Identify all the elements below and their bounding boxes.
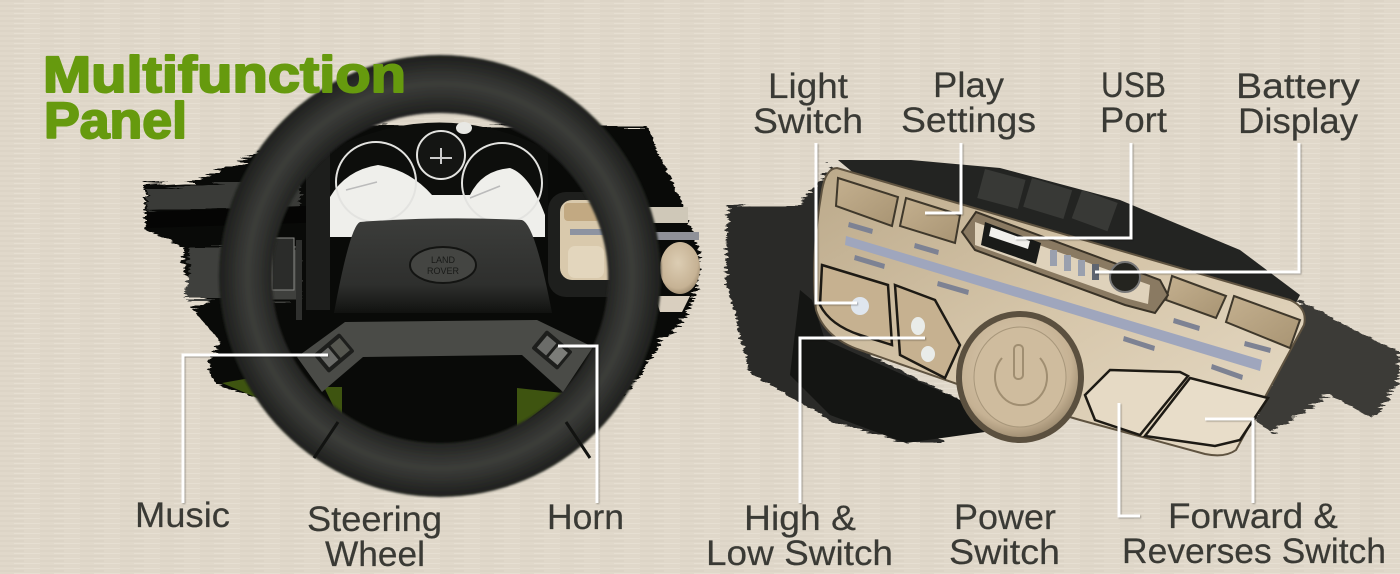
- callout line: reverse switch: [1205, 419, 1253, 503]
- light switch button: [820, 265, 892, 345]
- wheel rim joints: [314, 422, 590, 458]
- dashboard backdrop: [145, 125, 700, 450]
- label: battery display: Battery: [1236, 67, 1361, 106]
- small indicators: [848, 222, 1271, 380]
- land rover badge: LAND: [431, 255, 456, 265]
- high and low switch button: [895, 285, 960, 378]
- instrument cluster: [306, 122, 548, 310]
- side control panel seen through wheel: [548, 192, 700, 312]
- land rover badge: [410, 247, 476, 283]
- brush smudge right: [1255, 300, 1400, 433]
- panel: control plate: [724, 160, 1400, 455]
- top buttons: [836, 178, 1300, 348]
- label: play settings: [901, 66, 1036, 140]
- label: play settings: Settings: [901, 101, 1036, 140]
- label: light switch: Switch: [753, 102, 863, 141]
- label: forward and reverses switch: [1122, 497, 1386, 571]
- callout line: battery display: [1095, 143, 1299, 272]
- usb surface: [975, 222, 1150, 304]
- top dark housing: [838, 160, 1300, 315]
- aux socket: [1110, 262, 1140, 292]
- title: [43, 46, 406, 149]
- lower dark housing: [790, 290, 985, 443]
- callout line: music: [183, 355, 328, 503]
- left switch: music: [313, 333, 355, 373]
- label: light switch: [753, 67, 863, 141]
- label: power switch: Power: [954, 498, 1056, 537]
- steering wheel rim: [219, 55, 661, 497]
- label: power switch: [949, 498, 1060, 572]
- label: power switch: Switch: [949, 533, 1060, 572]
- title: Panel: [44, 92, 187, 149]
- label: light switch: Light: [768, 67, 848, 106]
- label: music: Music: [135, 496, 230, 535]
- right switch: horn: [531, 330, 573, 370]
- callout line: play settings: [925, 143, 961, 213]
- label: high and low switch: High &: [744, 499, 856, 538]
- label: steering wheel: Wheel: [325, 535, 425, 574]
- label: high and low switch: [706, 499, 893, 573]
- housing button blocks: [977, 169, 1118, 231]
- brush smudge left: [724, 165, 960, 443]
- panel: steering wheel and dashboard: [145, 55, 700, 497]
- label: high and low switch: Low Switch: [706, 534, 893, 573]
- label: play settings: Play: [933, 66, 1005, 105]
- callout line: forward switch: [1119, 403, 1140, 516]
- callout line: light switch: [816, 143, 857, 303]
- label: battery display: Display: [1238, 102, 1359, 141]
- callout line: horn: [558, 346, 597, 503]
- callout line: power switch: [1016, 370, 1018, 503]
- battery display bars: [1050, 250, 1099, 280]
- land rover badge: ROVER: [427, 266, 459, 276]
- light icon glow: [851, 297, 869, 315]
- label: horn: Horn: [547, 498, 624, 537]
- label: usb port: Port: [1100, 101, 1167, 140]
- spoke bar: [297, 320, 593, 392]
- high low icons: [911, 317, 935, 362]
- forward button: [1085, 370, 1188, 435]
- reverse button: [1145, 378, 1268, 446]
- light bar: [845, 236, 1262, 371]
- green patches behind wheel: [222, 378, 563, 428]
- label: forward and reverses switch: Forward &: [1168, 497, 1338, 536]
- label: steering wheel: Steering: [307, 500, 442, 539]
- usb recess: [962, 212, 1168, 313]
- power knob: [956, 311, 1084, 443]
- label: forward and reverses switch: Reverses Switch: [1122, 532, 1386, 571]
- dashboard left trim: [147, 165, 330, 320]
- label: steering wheel: [307, 500, 442, 574]
- callout line: usb port: [1015, 143, 1131, 238]
- label: usb port: USB: [1101, 66, 1166, 105]
- callout line: steering wheel: [368, 450, 372, 503]
- label: usb port: [1100, 66, 1167, 140]
- airbag hub: [334, 218, 552, 313]
- title: Multifunction: [43, 46, 406, 103]
- beige plate: [814, 168, 1305, 455]
- label: battery display: [1236, 67, 1361, 141]
- callout line: high and low switch: [800, 338, 925, 503]
- usb port: [981, 222, 1041, 264]
